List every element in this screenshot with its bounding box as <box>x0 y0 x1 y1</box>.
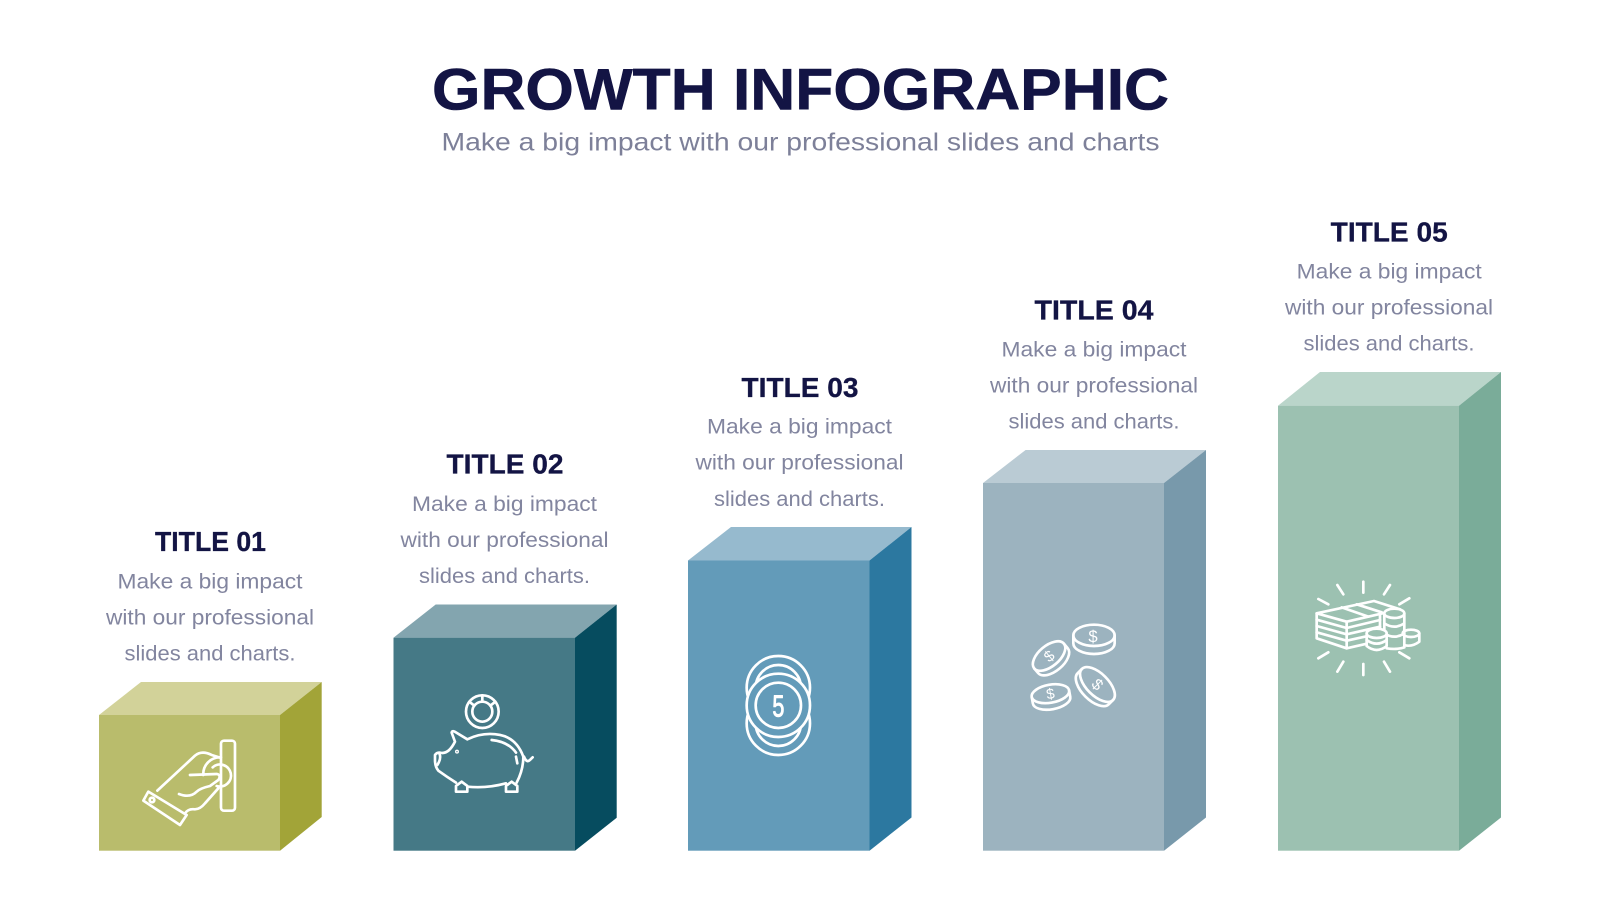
column 1 title: TITLE 01 <box>155 526 266 557</box>
block 5 <box>1278 372 1501 851</box>
column 5 description: Make a big impact <box>1297 260 1482 284</box>
icon: falling dollar coins <box>1028 625 1121 712</box>
column 2 description: slides and charts. <box>419 565 590 588</box>
column 4 description <box>989 338 1198 434</box>
block 2 <box>394 604 617 851</box>
column 3 <box>688 372 912 851</box>
column 1 description: slides and charts. <box>124 643 296 666</box>
column 3 description: with our professional <box>694 452 904 475</box>
block 4 <box>983 450 1206 851</box>
column 4 description: Make a big impact <box>1002 338 1187 362</box>
column 3 title: TITLE 03 <box>742 372 858 403</box>
column 3 description: slides and charts. <box>714 488 885 511</box>
column 5 <box>1278 217 1501 851</box>
icon: falling dollar coins: $ <box>1045 686 1056 703</box>
column 4 <box>983 295 1206 851</box>
column 4 description: with our professional <box>989 375 1198 398</box>
block 3 <box>688 527 912 851</box>
column 3 description <box>694 416 904 511</box>
column 2 description <box>399 493 608 588</box>
title: GROWTH INFOGRAPHIC <box>432 58 1169 122</box>
icon: money stack and coins <box>1317 582 1419 675</box>
column 4 description: slides and charts. <box>1008 411 1180 434</box>
column 5 description: with our professional <box>1284 297 1493 320</box>
column 5 description: slides and charts. <box>1304 333 1474 356</box>
icon: falling dollar coins: $ <box>1088 627 1098 646</box>
block 1 <box>99 682 322 851</box>
column 2 description: Make a big impact <box>412 493 597 516</box>
column 1 description: with our professional <box>105 607 314 630</box>
column 2 title: TITLE 02 <box>446 449 564 480</box>
icon: falling dollar coins: $ <box>1041 647 1059 666</box>
column 1 description: Make a big impact <box>118 570 303 594</box>
icon: piggy bank <box>435 695 533 792</box>
column 5 description <box>1284 260 1493 356</box>
icon: falling dollar coins: $ <box>1088 676 1106 694</box>
icon: coin stack with number: 5 <box>772 689 784 724</box>
subtitle: Make a big impact with our professional slides and charts <box>442 128 1160 156</box>
column 2 description: with our professional <box>399 529 608 552</box>
column 5 title: TITLE 05 <box>1331 217 1448 248</box>
column 2 <box>394 449 617 851</box>
column 4 title: TITLE 04 <box>1034 295 1154 326</box>
column 1 description <box>105 570 314 666</box>
icon: hand inserting coin <box>143 741 235 825</box>
column 1 <box>99 526 322 851</box>
column 3 description: Make a big impact <box>707 416 892 438</box>
icon: coin stack with number <box>747 656 810 755</box>
